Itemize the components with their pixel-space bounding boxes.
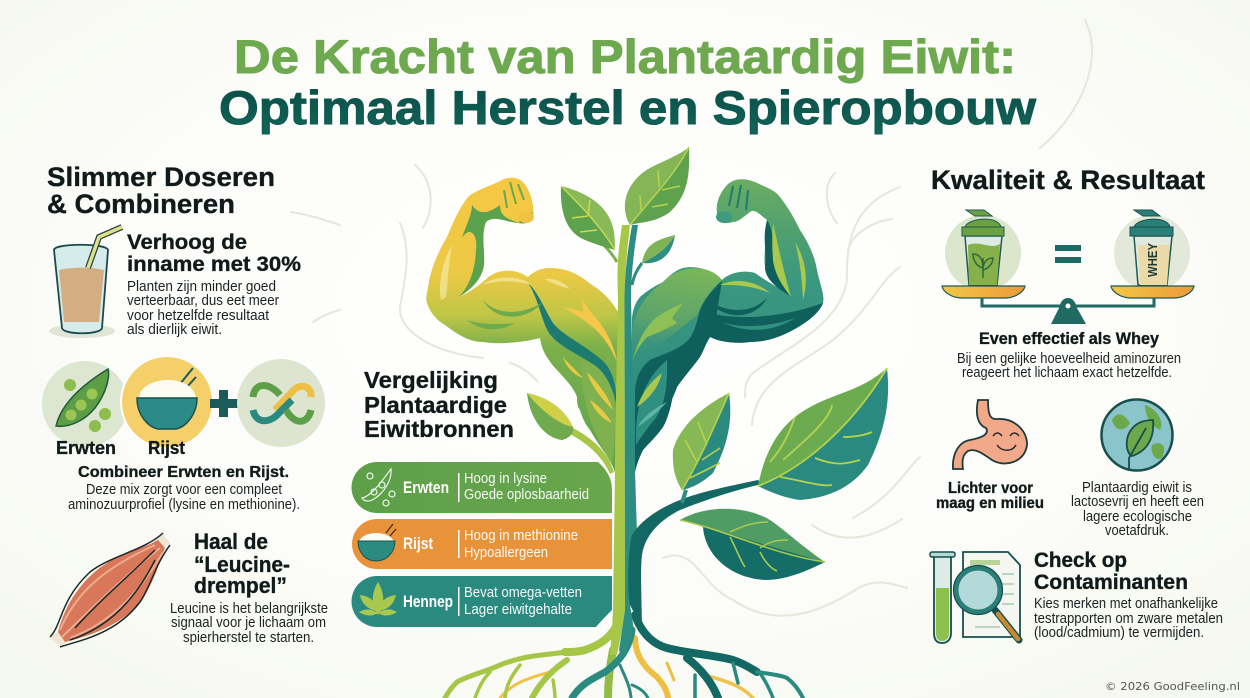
text: even effectief: reageert het lichaam exact hetzelfde. <box>962 364 1172 381</box>
text: verhoog inname: inname met 30% <box>127 253 301 276</box>
text: check op contaminanten: Check op <box>1034 549 1127 572</box>
heading: vergelijking: Plantaardige <box>364 392 507 418</box>
title: De Kracht van Plantaardig Eiwit: <box>234 30 1016 83</box>
bar: Erwten: Hoog in lysine <box>464 470 547 487</box>
left chest yellow streak <box>563 296 617 362</box>
bar: Erwten <box>352 462 612 513</box>
text: verhoog inname: Planten zijn minder goed <box>127 278 276 295</box>
panel: comparison bars <box>352 462 612 627</box>
text: leucine <box>170 529 328 646</box>
text: lichter voor maag: maag en milieu <box>936 495 1044 512</box>
panel: Kwaliteit & Resultaat <box>930 165 1223 643</box>
text: even effectief: Bij een gelijke hoeveelheid aminozuren <box>957 350 1181 367</box>
text: check op contaminanten: Kies merken met onafhankelijke <box>1034 595 1218 612</box>
text: lichter voor maag <box>936 480 1044 512</box>
bar: Hennep: Lager eiwitgehalte <box>464 601 572 618</box>
text: even effectief <box>957 329 1181 381</box>
left teal vine <box>528 283 616 404</box>
icon: test tube, report and magnifier <box>930 552 1020 643</box>
icon: amino chain links <box>237 359 325 447</box>
bar: Hennep <box>352 576 612 627</box>
heading <box>47 162 275 219</box>
bar: Rijst: Rijst <box>403 534 433 553</box>
icon: plus <box>210 390 238 417</box>
text: lactosevrij: lactosevrij en heeft een <box>1071 493 1204 510</box>
heading: Kwaliteit & Resultaat <box>931 165 1205 195</box>
bar: Rijst: Hypoallergeen <box>464 544 548 561</box>
icon: globe with leaf <box>1102 400 1172 470</box>
muscle definition <box>440 182 823 472</box>
leaf: large right <box>758 368 888 500</box>
text: verhoog inname: als dierlijk eiwit. <box>127 321 222 338</box>
bar: Hennep: Bevat omega-vetten <box>464 584 582 601</box>
central stem <box>610 225 638 660</box>
right lower arm edge <box>706 303 823 343</box>
text: combineer <box>68 464 300 513</box>
heading: vergelijking: Vergelijking <box>364 367 498 393</box>
heading: vergelijking <box>364 367 514 442</box>
text: leucine: Haal de <box>194 529 268 554</box>
title <box>219 30 1036 134</box>
heading: & Combineren <box>47 189 235 219</box>
left chest inner leaf <box>582 360 615 465</box>
icon: balance scale with shakers: WHEY <box>1145 243 1160 277</box>
text: lactosevrij: Plantaardig eiwit is <box>1082 479 1192 496</box>
heading: vergelijking: Eiwitbronnen <box>364 416 514 442</box>
text: leucine: Leucine is het belangrijkste <box>170 600 328 617</box>
copyright footer: © 2026 GoodFeeling.nl <box>1105 680 1240 693</box>
icon: muscle <box>50 533 170 647</box>
leaf: top center <box>625 147 689 225</box>
illustration: muscular plant <box>426 147 888 698</box>
leaf: middle right <box>673 393 730 490</box>
right chest leaf light <box>632 303 683 363</box>
text: leucine: “Leucine- <box>194 552 290 577</box>
right dark outer band <box>635 281 722 472</box>
leaf: lower left <box>527 393 573 440</box>
panel: Slimmer Doseren & Combineren <box>42 162 328 647</box>
bar: Rijst <box>352 519 612 569</box>
text: lactosevrij: lagere ecologische <box>1083 508 1192 525</box>
text: leucine: signaal voor je lichaam om <box>171 614 326 631</box>
labels: erwten and rijst <box>56 438 185 458</box>
title: Optimaal Herstel en Spieropbouw <box>219 81 1036 134</box>
labels: erwten and rijst: Rijst <box>148 438 185 458</box>
text: lactosevrij <box>1071 479 1204 539</box>
icon: shake glass <box>49 227 122 338</box>
bar: Hennep: Hennep <box>403 592 453 611</box>
text: verhoog inname: verteerbaar, dus eet meer <box>127 292 279 309</box>
text: check op contaminanten: (lood/cadmium) te vermijden. <box>1034 624 1204 641</box>
leaf: lower right <box>680 509 825 580</box>
labels: erwten and rijst: Erwten <box>56 438 116 458</box>
heading: Slimmer Doseren <box>47 162 275 192</box>
text: verhoog inname <box>127 231 301 338</box>
text: leucine: drempel” <box>194 573 287 598</box>
text: check op contaminanten: testrapporten om zware metalen <box>1034 610 1223 627</box>
text: combineer: aminozuurprofiel (lysine en methionine). <box>68 496 300 513</box>
text: combineer: Combineer Erwten en Rijst. <box>78 464 289 481</box>
text: verhoog inname: voor hetzelfde resultaat <box>127 307 270 324</box>
right side branch <box>628 480 762 628</box>
text: verhoog inname: Verhoog de <box>127 231 247 254</box>
icon: rice bowl <box>120 355 214 449</box>
right arm and torso <box>632 179 823 472</box>
icon: peas <box>42 361 128 447</box>
leaf: small <box>642 235 675 263</box>
text: even effectief: Even effectief als Whey <box>979 329 1160 348</box>
left arm crease <box>459 205 533 297</box>
text: check op contaminanten <box>1034 549 1223 641</box>
bar: Rijst: Hoog in methionine <box>464 527 578 544</box>
right chest inner leaf <box>636 360 667 445</box>
plant roots <box>445 615 803 698</box>
text: check op contaminanten: Contaminanten <box>1034 571 1188 594</box>
icon: smiling stomach <box>953 400 1027 469</box>
text: lichter voor maag: Lichter voor <box>948 480 1033 497</box>
left arm and torso <box>426 178 618 472</box>
leaf: top left <box>561 186 615 250</box>
bar: Erwten: Erwten <box>403 478 449 497</box>
text: leucine: spierherstel te starten. <box>183 629 314 646</box>
right arm chest highlight <box>632 268 722 370</box>
icon: balance scale with shakers <box>942 210 1194 324</box>
left arm arcs <box>467 299 542 329</box>
bar: Erwten: Goede oplosbaarheid <box>464 486 589 503</box>
text: lactosevrij: voetafdruk. <box>1105 522 1169 539</box>
text: combineer: Deze mix zorgt voor een compleet <box>86 481 283 498</box>
